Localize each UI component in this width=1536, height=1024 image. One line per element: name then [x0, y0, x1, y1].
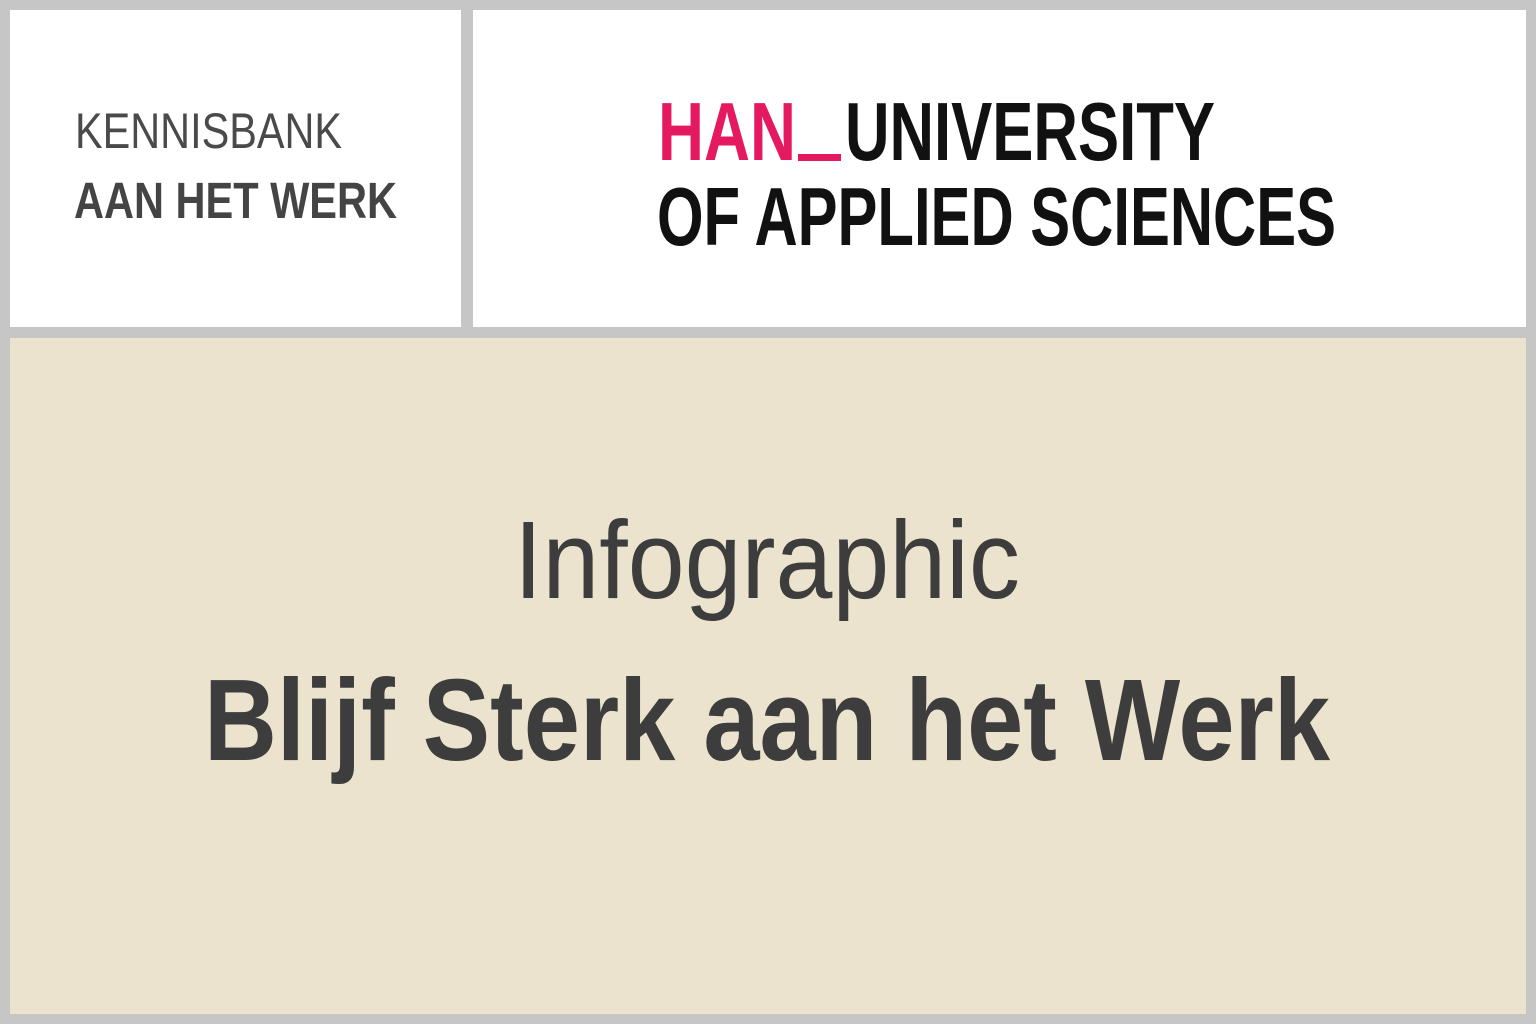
text: HAN: HAN: [658, 85, 796, 178]
text: main title: Blijf Sterk aan het Werk: [204, 655, 1330, 785]
text: university: UNIVERSITY: [845, 85, 1215, 178]
panel: kennisbank: [10, 10, 461, 327]
text: infographic: Infographic: [514, 499, 1020, 622]
text: kennisbank: KENNISBANK: [75, 103, 342, 159]
underscore: [798, 154, 841, 161]
text: aan het werk: AAN HET WERK: [74, 172, 397, 229]
panel: HAN logo: [473, 10, 1526, 327]
